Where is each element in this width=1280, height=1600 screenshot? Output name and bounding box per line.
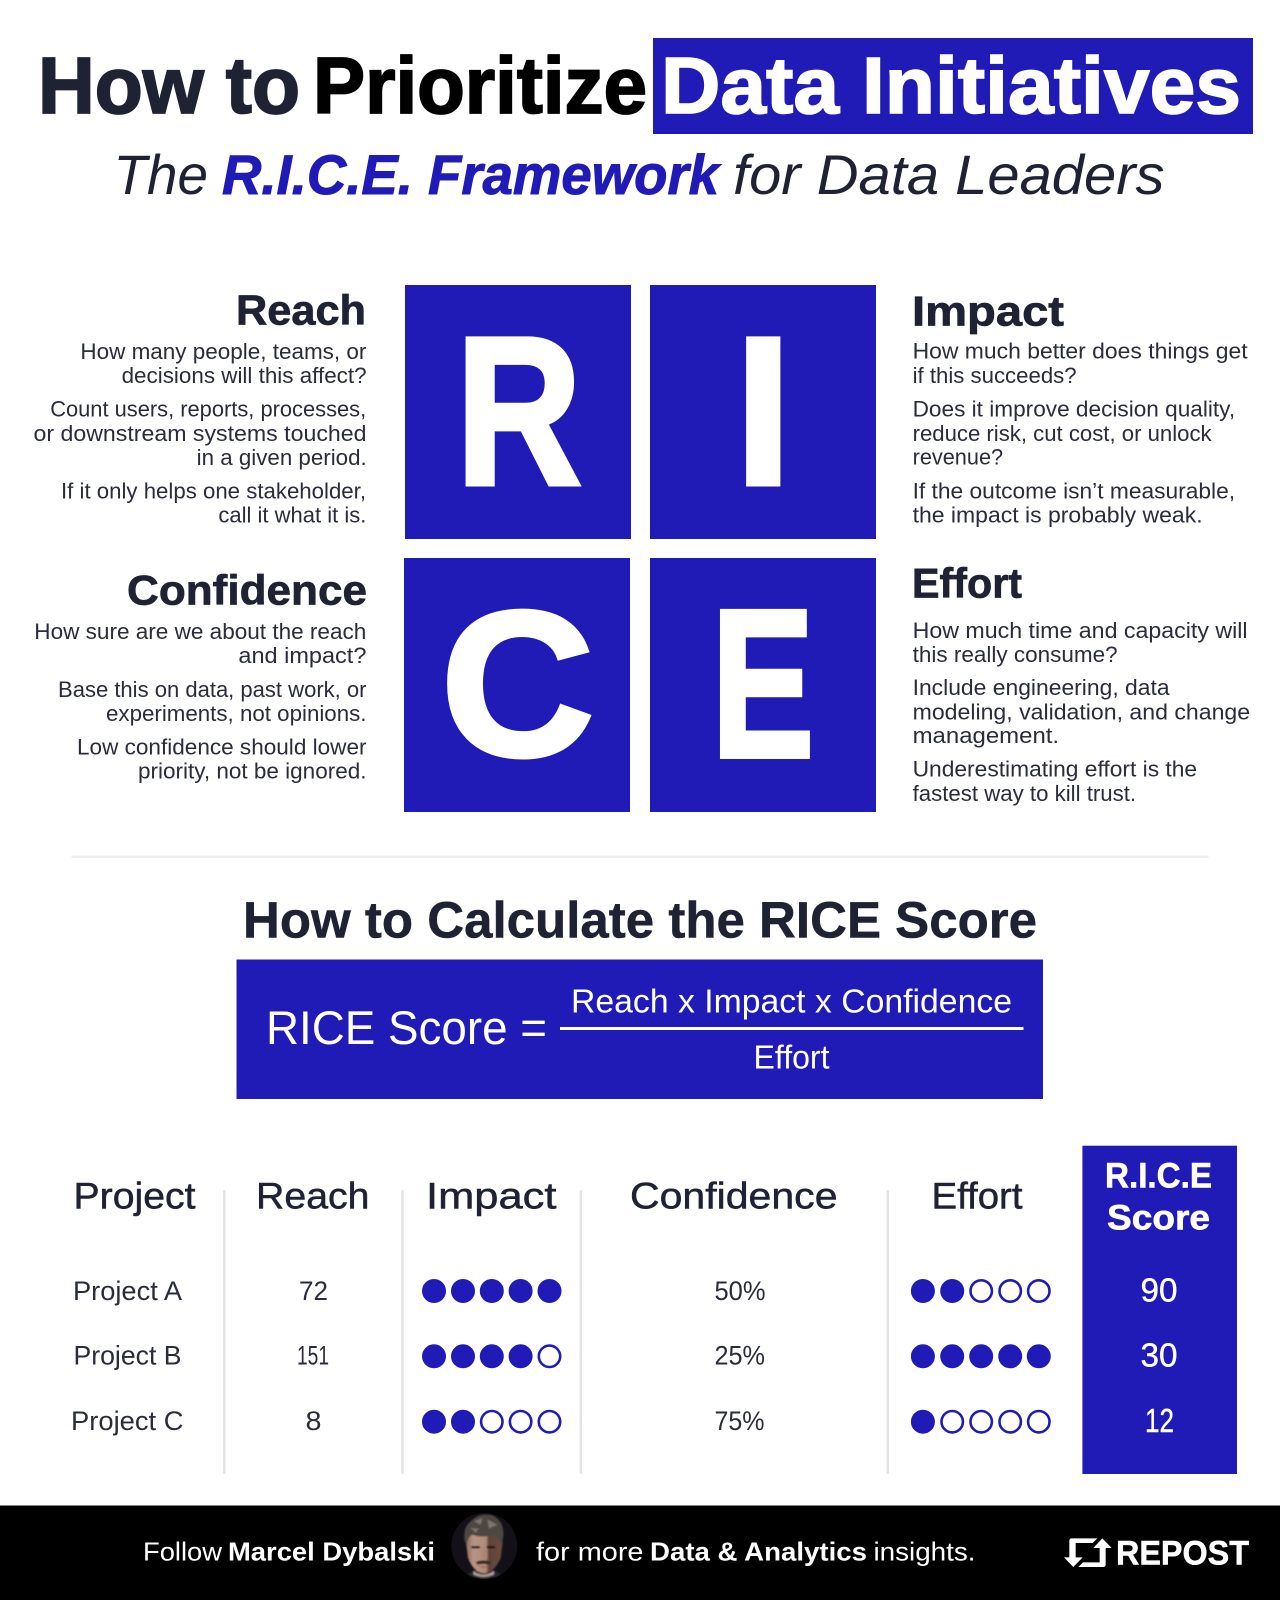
panel: R.I.C.E score column: Score	[1107, 1198, 1210, 1237]
footer: follow text: Follow	[143, 1537, 222, 1567]
panel: Effort description: fastest way to kill trust.	[913, 781, 1136, 806]
panel: formula	[236, 960, 1043, 1099]
table: effort dots	[912, 1280, 1050, 1432]
panel: Impact description: Impact	[912, 287, 1064, 334]
title: Data Initiatives	[661, 41, 1241, 130]
panel: Impact description: If the outcome isn’t measurable,	[913, 479, 1235, 504]
panel: Effort description: Include engineering, data	[913, 675, 1170, 700]
panel: Confidence description: Confidence	[127, 566, 367, 614]
table: confidence values	[714, 1276, 766, 1436]
table: reach values: 72	[299, 1276, 328, 1306]
panel: Confidence description: How sure are we about the reach	[34, 619, 366, 644]
panel: Confidence description	[34, 566, 367, 784]
table: column headers	[74, 1175, 1023, 1216]
panel: Reach description: or downstream systems touched	[34, 421, 366, 446]
panel: Reach description: in a given period.	[197, 445, 367, 470]
footer: avatar portrait	[451, 1513, 517, 1583]
panel: formula: RICE Score =	[266, 1001, 547, 1054]
panel: Confidence description: Low confidence should lower	[77, 735, 366, 760]
heading: how to calculate: How to Calculate the RICE Score	[243, 892, 1037, 949]
table: confidence values: 50%	[714, 1276, 766, 1306]
panel: Confidence description: and impact?	[238, 643, 366, 668]
panel: E square: E	[712, 566, 814, 802]
footer: follow text	[143, 1537, 435, 1567]
table: reach values: 8	[306, 1406, 322, 1436]
footer: follow text: Marcel Dybalski	[228, 1537, 435, 1567]
panel: Effort description: this really consume?	[913, 642, 1118, 667]
table: column dividers	[223, 1190, 889, 1474]
panel: Reach description: decisions will this affect?	[122, 363, 367, 388]
panel: Reach description: How many people, teams, or	[80, 339, 366, 364]
table: column headers: Effort	[932, 1175, 1023, 1216]
panel: Reach description: Count users, reports, processes,	[50, 397, 366, 422]
panel: Reach description: If it only helps one stakeholder,	[61, 479, 366, 504]
panel: Reach description	[34, 287, 367, 528]
panel: Impact description: if this succeeds?	[913, 363, 1077, 388]
footer: insights text	[536, 1537, 976, 1567]
panel: Effort description: management.	[913, 723, 1059, 748]
table: column headers: Reach	[256, 1175, 370, 1216]
panel: R.I.C.E score column: 12	[1145, 1402, 1174, 1439]
panel: R.I.C.E score column: R.I.C.E	[1105, 1156, 1212, 1195]
panel: Impact description: Does it improve decision quality,	[913, 396, 1235, 421]
footer: repost wordmark: REPOST	[1116, 1534, 1249, 1572]
table: project names: Project C	[71, 1406, 184, 1436]
table: column headers: Confidence	[630, 1175, 838, 1216]
panel: Impact description	[912, 287, 1248, 528]
panel: Reach description: call it what it is.	[218, 503, 366, 528]
title: Prioritize	[313, 41, 647, 130]
panel: R square: R	[456, 293, 582, 529]
panel: formula: Reach x Impact x Confidence	[571, 983, 1012, 1020]
subtitle: The	[114, 143, 208, 206]
table: reach values	[297, 1276, 329, 1436]
panel: Impact description: the impact is probably weak.	[913, 503, 1203, 528]
panel: Effort description: How much time and capacity will	[913, 618, 1248, 643]
panel: Effort description: modeling, validation, and change	[913, 699, 1250, 724]
panel: formula: Effort	[754, 1038, 830, 1075]
panel: C square	[404, 558, 630, 812]
panel: Impact description: reduce risk, cut cost, or unlock	[913, 421, 1213, 446]
panel: Confidence description: priority, not be ignored.	[138, 759, 366, 784]
panel: R.I.C.E score column	[1082, 1146, 1237, 1474]
table: impact dots	[423, 1280, 560, 1432]
panel: Effort description: Underestimating effort is the	[913, 756, 1197, 781]
footer: insights text: Data & Analytics	[650, 1537, 867, 1567]
table: reach values: 151	[297, 1341, 329, 1371]
panel: C square: C	[441, 569, 594, 799]
subtitle	[114, 143, 1164, 206]
footer: insights text: for more	[536, 1537, 644, 1567]
table: column headers: Project	[74, 1175, 196, 1216]
title: How to	[38, 41, 300, 130]
panel: Confidence description: experiments, not opinions.	[106, 701, 366, 726]
panel: Effort description	[912, 560, 1250, 806]
panel: Impact description: How much better does things get	[913, 339, 1248, 364]
panel: R.I.C.E score column: 30	[1140, 1337, 1178, 1374]
subtitle: for Data Leaders	[733, 143, 1164, 206]
icon: repost arrows	[1064, 1538, 1112, 1567]
table: project names: Project B	[74, 1341, 182, 1371]
table: column headers: Impact	[426, 1175, 557, 1216]
panel: I square	[650, 285, 876, 539]
panel: Confidence description: Base this on data, past work, or	[58, 677, 366, 702]
table: project names: Project A	[73, 1276, 182, 1306]
table: confidence values: 25%	[714, 1341, 765, 1371]
panel: Impact description: revenue?	[913, 445, 1003, 470]
panel: Reach description: Reach	[236, 287, 366, 334]
subtitle: R.I.C.E. Framework	[222, 143, 722, 206]
panel: R square	[405, 285, 631, 539]
footer bar	[0, 1506, 1280, 1600]
footer: insights text: insights.	[874, 1537, 976, 1567]
title	[38, 38, 1253, 134]
panel: Effort description: Effort	[912, 560, 1022, 606]
table: project names	[71, 1276, 184, 1436]
table: confidence values: 75%	[714, 1406, 764, 1436]
panel: R.I.C.E score column: 90	[1140, 1272, 1178, 1309]
panel: E square	[650, 558, 876, 812]
panel: I square: I	[735, 293, 792, 529]
